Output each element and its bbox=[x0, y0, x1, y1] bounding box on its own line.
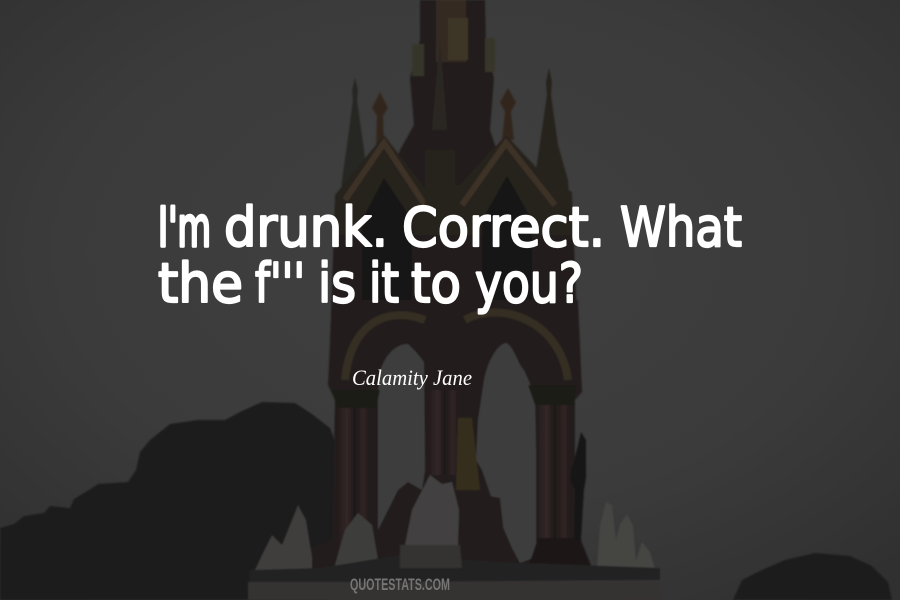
quote line 1: Correct. bbox=[402, 196, 605, 259]
quote line 1: I'm bbox=[158, 196, 211, 259]
arch opening: right bbox=[476, 343, 538, 563]
column: left bbox=[337, 404, 371, 550]
finial: left bbox=[372, 92, 388, 145]
quote line 2: is bbox=[318, 252, 356, 315]
dark statue bbox=[570, 432, 586, 540]
gables and upper body bbox=[330, 135, 578, 345]
quote line 1 bbox=[158, 196, 742, 259]
white statues: centre bbox=[405, 475, 459, 545]
tree: left foreground bbox=[0, 402, 408, 600]
gable ornaments bbox=[345, 143, 555, 205]
watermark: QUOTESTATS.COM bbox=[350, 575, 450, 594]
quote line 2 bbox=[158, 252, 583, 315]
quote line 2: it bbox=[369, 252, 399, 315]
arch trim bbox=[345, 312, 568, 380]
spire: left bbox=[338, 78, 372, 240]
monument bbox=[248, 0, 660, 600]
author name: Calamity Jane bbox=[352, 365, 472, 390]
white statues: left group bbox=[255, 505, 312, 570]
gold pedestal bbox=[456, 418, 480, 490]
base slab bbox=[250, 555, 660, 583]
arches and lower body bbox=[250, 300, 590, 570]
arch opening: left bbox=[378, 344, 425, 530]
right column base bbox=[528, 538, 592, 568]
quote line 2: f''' bbox=[255, 252, 305, 315]
white statues: right bbox=[597, 502, 655, 568]
column capital: right bbox=[528, 385, 576, 405]
base stonework bbox=[248, 582, 660, 600]
tree: bottom right bbox=[733, 553, 892, 600]
column capital: left bbox=[332, 390, 380, 408]
finial: right bbox=[500, 88, 516, 140]
quote text bbox=[158, 196, 742, 315]
quote line 2: the bbox=[158, 252, 243, 315]
quote line 1: drunk. bbox=[224, 196, 388, 259]
quote line 2: you? bbox=[475, 252, 583, 315]
column: centre bbox=[428, 390, 460, 475]
central tower bbox=[380, 0, 510, 210]
spire: right bbox=[532, 68, 572, 240]
pedestal bbox=[458, 490, 508, 565]
quote line 2: to bbox=[411, 252, 461, 315]
quote line 1: What bbox=[620, 196, 742, 259]
centre plinth bbox=[400, 545, 462, 568]
column: right bbox=[536, 402, 572, 542]
